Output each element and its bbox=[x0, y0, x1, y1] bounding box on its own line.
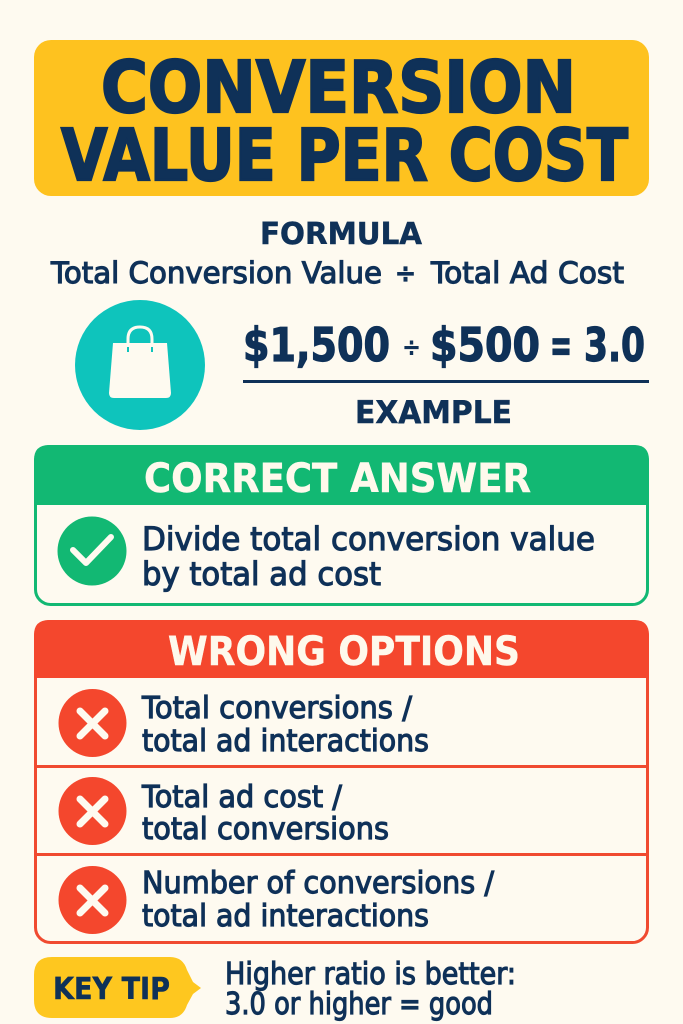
key tip badge bbox=[34, 957, 201, 1018]
option 2: total conversions bbox=[142, 812, 389, 847]
formula text: Total Ad Cost bbox=[430, 256, 624, 290]
worked example: $500 bbox=[430, 318, 540, 372]
correct answer header bbox=[34, 445, 649, 505]
correct answer text bbox=[142, 520, 595, 593]
formula text: Total Conversion Value bbox=[50, 256, 382, 290]
worked example: EXAMPLE bbox=[355, 395, 512, 431]
key tip badge: KEY TIP bbox=[53, 972, 170, 1007]
option 2 bbox=[58, 777, 389, 847]
formula heading: FORMULA bbox=[260, 217, 423, 252]
option 3 bbox=[58, 866, 495, 934]
worked example: $1,500 bbox=[243, 318, 390, 372]
formula text bbox=[50, 256, 624, 290]
correct answer text: by total ad cost bbox=[142, 555, 381, 593]
title banner: CONVERSION bbox=[101, 46, 576, 129]
formula text: ÷ bbox=[395, 256, 416, 290]
key tip text: 3.0 or higher = good bbox=[225, 987, 493, 1022]
option 1: Total conversions / bbox=[141, 691, 413, 726]
option 2: Total ad cost / bbox=[141, 780, 343, 815]
panel: wrong options bbox=[34, 620, 649, 942]
wrong options header bbox=[34, 620, 649, 678]
option 3: total ad interactions bbox=[142, 899, 429, 934]
option 1: total ad interactions bbox=[142, 724, 429, 759]
icon: check mark bbox=[58, 516, 126, 586]
icon: shopping bag bbox=[75, 300, 205, 430]
key tip text: Higher ratio is better: bbox=[225, 957, 516, 992]
option 1 bbox=[58, 689, 429, 759]
worked example: ÷ bbox=[402, 332, 421, 363]
correct answer text: Divide total conversion value bbox=[142, 520, 595, 558]
option 3: Number of conversions / bbox=[142, 866, 495, 901]
correct answer heading: CORRECT ANSWER bbox=[144, 456, 531, 502]
worked example bbox=[243, 318, 649, 431]
worked example: = bbox=[550, 318, 572, 372]
panel: correct answer bbox=[34, 445, 649, 604]
key tip text bbox=[225, 957, 516, 1022]
worked example: 3.0 bbox=[584, 318, 645, 372]
title banner bbox=[34, 40, 649, 197]
wrong options heading: WRONG OPTIONS bbox=[168, 629, 520, 675]
